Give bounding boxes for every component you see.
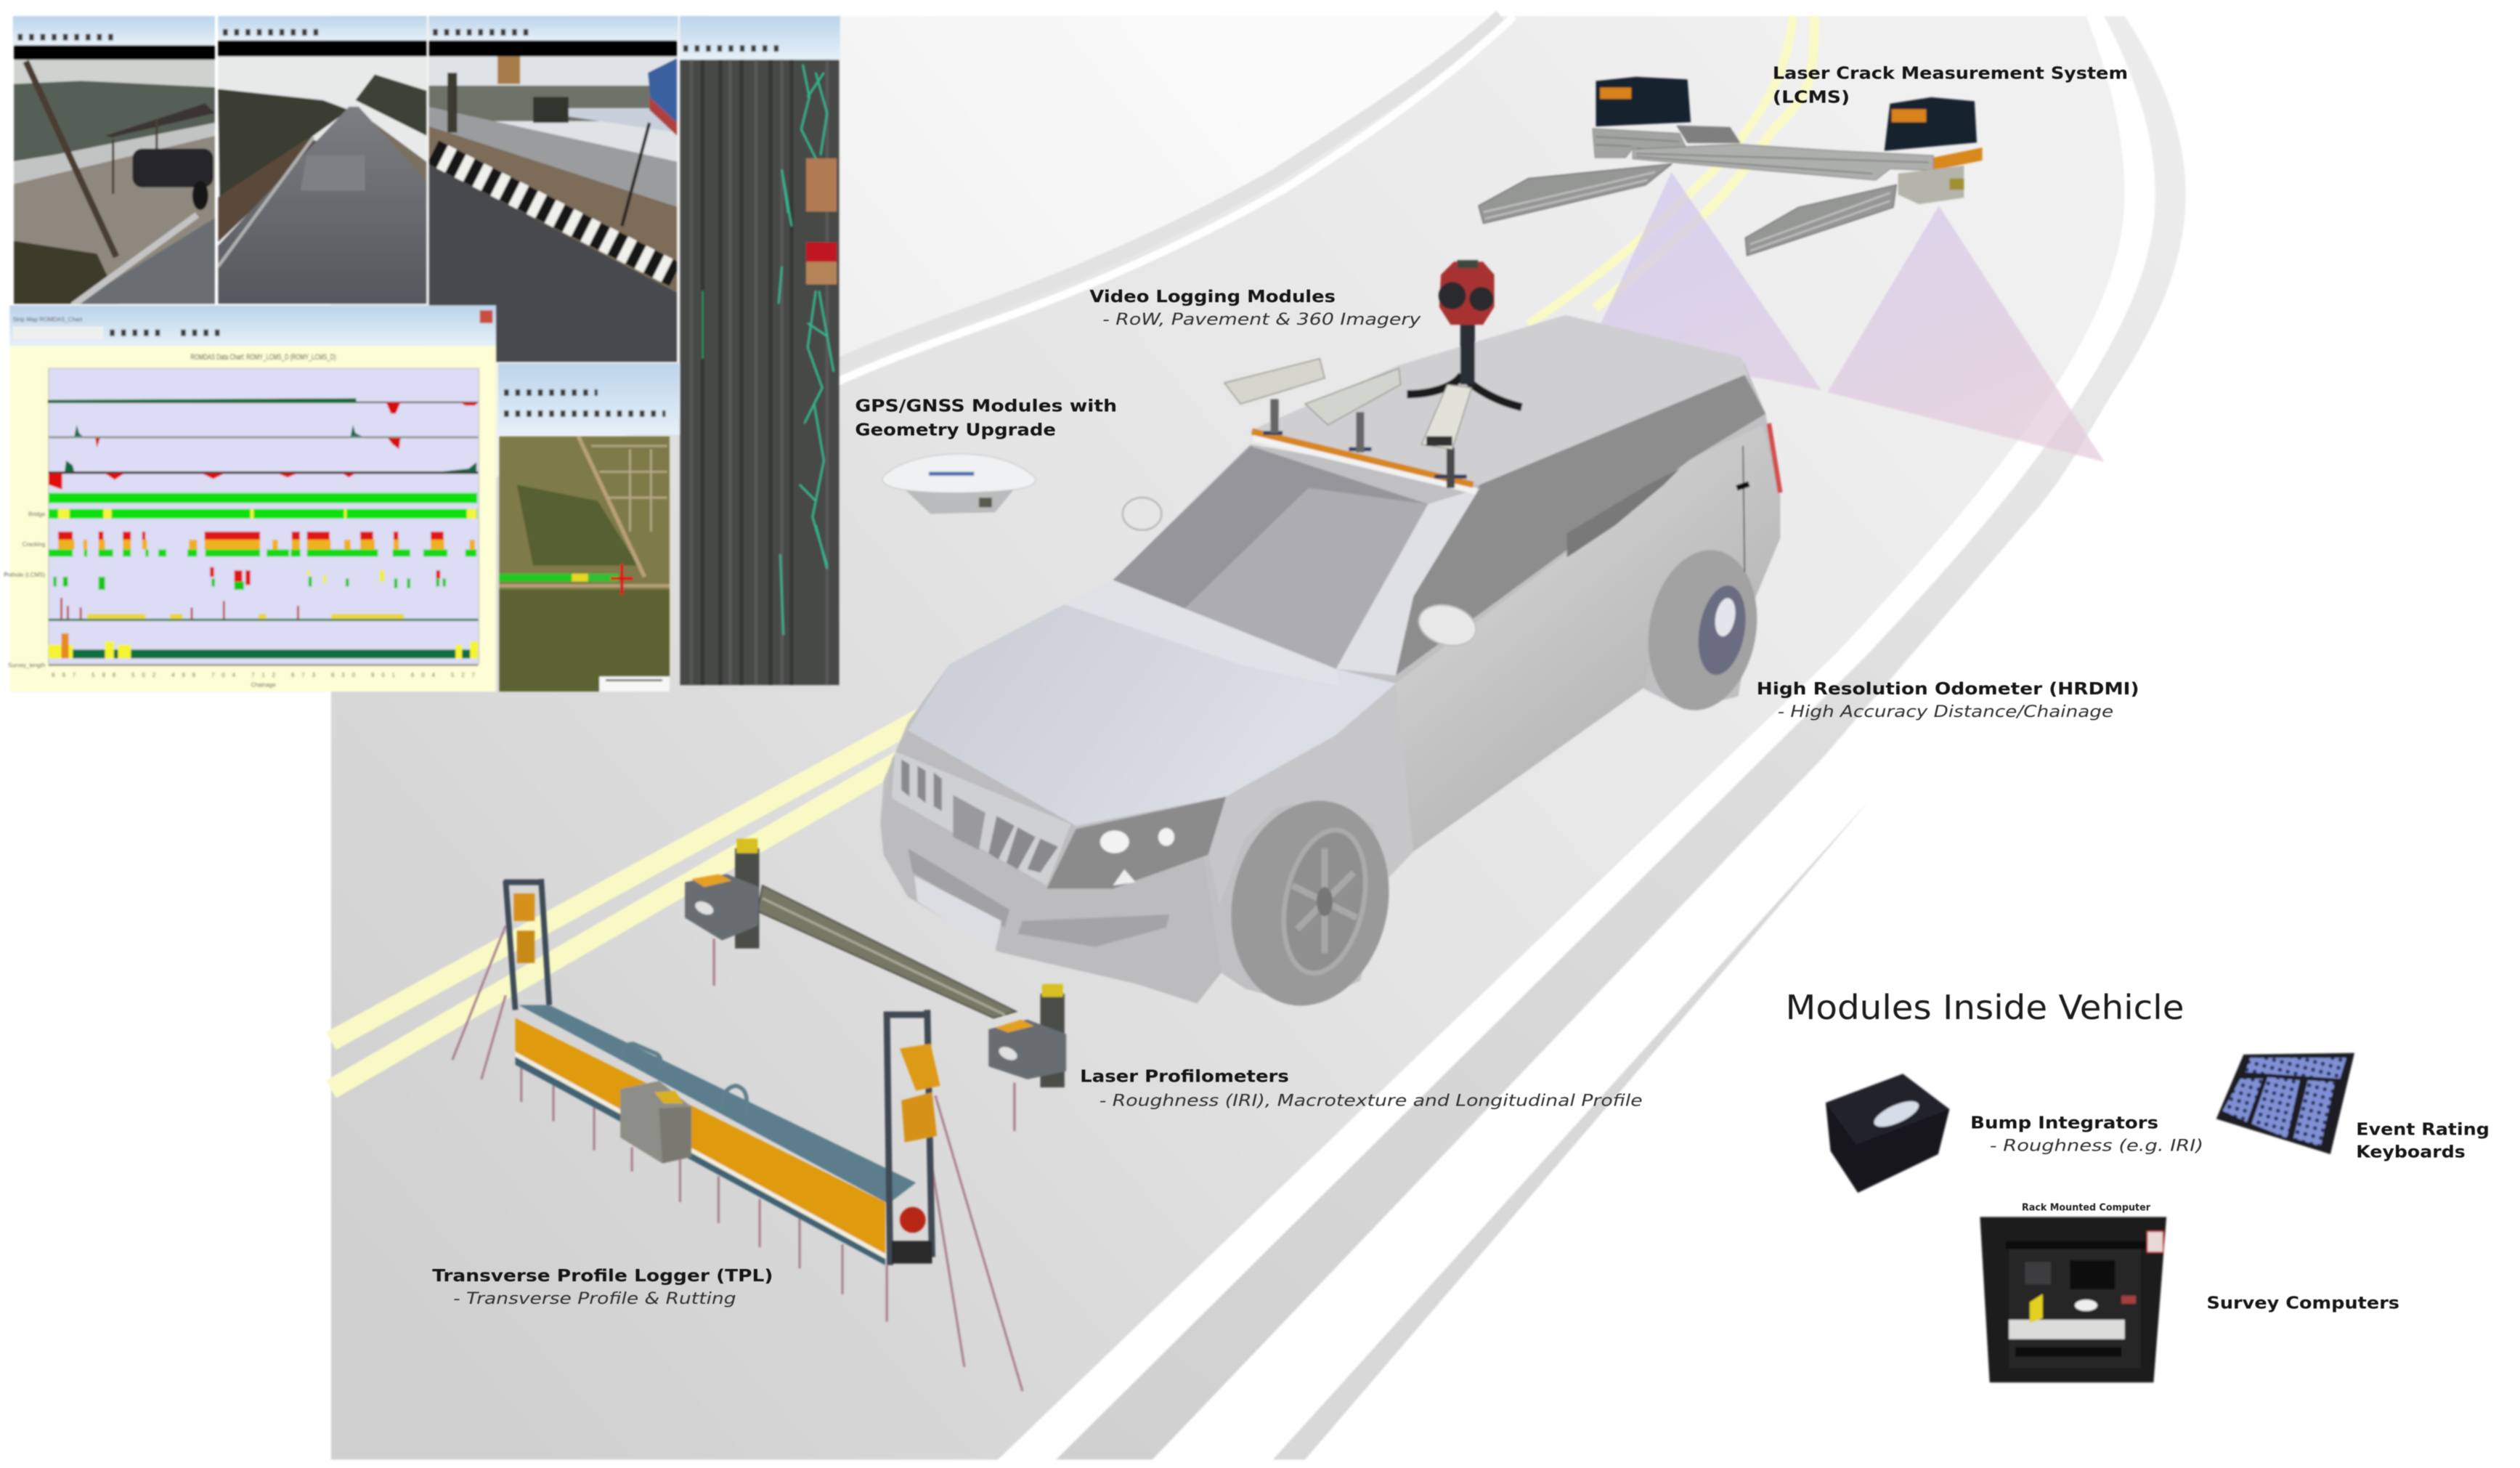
LCMS unit bbox=[1479, 77, 1983, 256]
left road edge white line bbox=[828, 16, 1514, 386]
bridge yellow blocks bbox=[58, 509, 476, 519]
rack yellow tag bbox=[2030, 1294, 2043, 1323]
fender bbox=[1208, 684, 1413, 905]
map area bbox=[499, 437, 670, 693]
TPL left sensor top bbox=[513, 893, 535, 921]
A pillar bbox=[1336, 488, 1480, 676]
chart x axis bbox=[49, 665, 478, 666]
LCMS right sensor box bbox=[1885, 97, 1977, 151]
window 3 toolbar icons bbox=[433, 31, 533, 33]
window 1 road photo bbox=[13, 60, 216, 305]
roof rack white strip bbox=[1253, 438, 1476, 491]
label: survey computers: Survey Computers bbox=[2206, 1292, 2399, 1313]
license plate bbox=[914, 876, 1001, 952]
front rim bbox=[1272, 822, 1378, 981]
GPS dome bbox=[882, 454, 1036, 492]
label: laser profilometers: Laser Profilometers bbox=[1080, 1066, 1289, 1086]
lower bumper intake bbox=[908, 848, 1009, 928]
label: LCMS: Laser Crack Measurement System bbox=[1773, 62, 2128, 83]
profilometer laser lines bbox=[714, 938, 1015, 1131]
360 camera tripod base bbox=[1407, 375, 1521, 407]
series one dips bbox=[386, 402, 478, 413]
software screenshots collage bbox=[4, 16, 840, 693]
chart title bar bbox=[9, 305, 496, 346]
front hub bbox=[1317, 887, 1333, 916]
TPL lower white trim bbox=[516, 1052, 885, 1259]
label: video logging: Video Logging Modules bbox=[1089, 286, 1336, 307]
window 1 toolbar icons bbox=[17, 36, 116, 38]
label: odometer bbox=[1757, 678, 2139, 721]
GPS connector bbox=[979, 498, 992, 507]
windshield inner reflection bbox=[1184, 488, 1428, 669]
LCMS right sensor label bbox=[1892, 109, 1926, 122]
rack drive bay bbox=[2070, 1260, 2115, 1289]
series two spikes bbox=[74, 425, 362, 437]
GPS receiver icon bbox=[882, 454, 1036, 514]
label: odometer: High Resolution Odometer (HRDMI) bbox=[1757, 678, 2139, 699]
LCMS right arm bbox=[1745, 185, 1896, 256]
green trace line bbox=[702, 291, 704, 359]
label: GPS: GPS/GNSS Modules with bbox=[855, 396, 1117, 416]
side windows bbox=[1396, 375, 1765, 676]
potholes yellow marks bbox=[307, 570, 384, 583]
TPL dark base bbox=[892, 1241, 932, 1264]
LCMS main beam bbox=[1633, 145, 1933, 180]
360 camera lens left bbox=[1439, 282, 1466, 309]
rack red connector bbox=[2121, 1296, 2136, 1304]
keyboard right keys bbox=[2293, 1080, 2336, 1146]
spikes bbox=[62, 598, 298, 619]
LCMS left sensor label bbox=[1600, 88, 1631, 99]
off-road pale area bbox=[331, 16, 1501, 530]
TPL laser lines bbox=[452, 926, 1023, 1391]
beam one bbox=[1583, 172, 1821, 391]
front tyre bbox=[1213, 786, 1407, 1021]
rack port row bbox=[2015, 1347, 2121, 1357]
label: event rating: Keyboards bbox=[2356, 1141, 2466, 1161]
video camera two mount bbox=[1358, 412, 1362, 453]
label: GPS bbox=[855, 396, 1117, 440]
pavement scan image bbox=[680, 60, 840, 685]
spikes baseline bbox=[49, 619, 478, 620]
headlight cluster bbox=[1046, 797, 1226, 888]
roof bbox=[1248, 315, 1748, 484]
label: bump integrators: - Roughness (e.g. IRI) bbox=[1990, 1137, 2203, 1156]
mirror far bbox=[1414, 599, 1481, 652]
series three dips bbox=[49, 474, 355, 490]
LCMS left arm rails bbox=[1484, 172, 1655, 219]
chart title: ROMDAS Data Chart: ROMY_LCMS_D (ROMY_LCMS_D) bbox=[190, 353, 336, 362]
rear quarter glass bbox=[1567, 469, 1680, 557]
grille slats left bbox=[901, 759, 942, 811]
map window bbox=[498, 364, 679, 693]
left sensor box bbox=[685, 874, 759, 941]
grille centre mesh bbox=[953, 795, 985, 850]
tail light bbox=[1769, 423, 1780, 492]
window 2 info bar bbox=[218, 41, 426, 57]
window 2 toolbar icons bbox=[223, 31, 320, 33]
beam two bbox=[1827, 206, 2105, 462]
chart window title: Strip Map ROMDAS_Chart bbox=[13, 317, 83, 323]
video window 1 bbox=[13, 16, 216, 305]
car side panel bbox=[1336, 425, 1780, 884]
TPL right sensor top bbox=[900, 1044, 940, 1091]
grille frame bbox=[892, 751, 1071, 885]
right sensor yellow cap bbox=[1042, 984, 1063, 997]
cracking yellow row bbox=[58, 540, 475, 549]
LCMS rail lines bbox=[1596, 137, 1929, 174]
event keyboard base bbox=[2216, 1053, 2354, 1154]
label: LCMS: (LCMS) bbox=[1773, 87, 1850, 108]
crack patch lower bbox=[806, 261, 837, 285]
headlight small lens bbox=[1158, 828, 1174, 845]
window 2 road photo bbox=[218, 57, 426, 304]
yellow line two lower bbox=[331, 723, 964, 1090]
yellow line two upper bbox=[1595, 16, 1814, 308]
right sensor upright bbox=[1040, 994, 1065, 1087]
series three line bbox=[49, 472, 478, 474]
cracking green row bbox=[49, 549, 476, 556]
label: bump integrators: Bump Integrators bbox=[1970, 1113, 2158, 1133]
rear wheel bbox=[1636, 541, 1769, 719]
rear tyre bbox=[1636, 541, 1769, 719]
TPL handle one bbox=[622, 1044, 661, 1070]
potholes row bbox=[210, 567, 440, 585]
right sensor label bbox=[995, 1020, 1034, 1032]
crack patch red bbox=[806, 243, 837, 261]
keyboard left keys bbox=[2223, 1079, 2263, 1122]
chart close button bbox=[480, 310, 492, 323]
LCMS left sensor box bbox=[1596, 77, 1691, 126]
pavement scan wheel paths bbox=[703, 60, 792, 685]
left sensor label bbox=[691, 874, 732, 887]
fog grille bbox=[1017, 915, 1169, 947]
windshield bbox=[1113, 446, 1428, 669]
TPL orange face bbox=[516, 1018, 885, 1254]
cracking red row bbox=[58, 532, 444, 540]
heading: modules inside vehicle: Modules Inside Vehicle bbox=[1786, 988, 2184, 1027]
vehicle bbox=[880, 260, 1780, 1021]
detected crack lines bbox=[779, 65, 834, 635]
GPS brand mark bbox=[929, 472, 974, 476]
fog lens bbox=[1113, 869, 1136, 885]
label: laser profilometers: - Roughness (IRI), Macrotexture and Longitudinal Profile bbox=[1100, 1092, 1643, 1111]
grille slats right bbox=[988, 816, 1058, 872]
surface yellow blocks bbox=[49, 641, 478, 658]
front wheel bbox=[1213, 786, 1407, 1021]
LCMS left arm bbox=[1479, 164, 1672, 224]
TPL right post bbox=[884, 1010, 932, 1265]
crack patch orange bbox=[806, 158, 837, 211]
window 1 info bar bbox=[14, 45, 215, 60]
label: GPS: Geometry Upgrade bbox=[855, 420, 1056, 440]
window 1 toolbar bbox=[13, 16, 215, 45]
video camera one mount bbox=[1273, 399, 1277, 433]
TPL centre box label bbox=[654, 1091, 683, 1103]
yellow line one upper bbox=[1529, 16, 1793, 324]
label: video logging bbox=[1089, 286, 1421, 329]
car body silhouette bbox=[880, 364, 1780, 1005]
video window 3 bbox=[428, 16, 678, 364]
TPL right sensor bottom bbox=[901, 1092, 937, 1143]
bump integrator logo bbox=[1871, 1096, 1922, 1132]
pavement camera mount bbox=[1449, 447, 1452, 488]
map toolbar bbox=[498, 364, 679, 434]
mirror near bbox=[1123, 498, 1161, 530]
label: event rating: Event Rating bbox=[2356, 1119, 2489, 1139]
series three rises bbox=[65, 461, 476, 472]
label: rack computer: Rack Mounted Computer bbox=[2022, 1201, 2150, 1213]
LCMS short rail bbox=[1676, 126, 1741, 143]
right sensor logo bbox=[997, 1045, 1019, 1063]
chart body bbox=[9, 346, 496, 692]
right sensor box bbox=[988, 1020, 1066, 1079]
series two baseline bbox=[49, 437, 478, 438]
yellow speckle bbox=[87, 614, 404, 619]
rear rim bbox=[1692, 582, 1752, 678]
transverse profile logger bbox=[452, 879, 1023, 1391]
crack window toolbar bbox=[680, 16, 840, 60]
potholes green marks bbox=[53, 577, 446, 590]
TPL left sensor bottom bbox=[517, 930, 535, 963]
360 camera top bbox=[1457, 260, 1478, 268]
rack computer inner bbox=[2009, 1249, 2141, 1368]
window 2 toolbar bbox=[218, 16, 426, 41]
video camera one bbox=[1224, 359, 1325, 404]
pavement camera lens bbox=[1426, 437, 1452, 446]
profilometer beam stripe bbox=[763, 899, 1005, 1015]
series two dips bbox=[95, 438, 401, 449]
cowl highlight bbox=[1065, 580, 1341, 686]
antenna tab bbox=[1736, 482, 1750, 490]
front fascia bbox=[880, 730, 1222, 1003]
window 3 info bar bbox=[429, 41, 677, 57]
labels bbox=[432, 62, 2489, 1313]
surface orange block bbox=[62, 633, 69, 658]
laser profilometer unit bbox=[685, 838, 1066, 1131]
TPL centre box side bbox=[659, 1107, 691, 1164]
keyboard top keys bbox=[2245, 1058, 2346, 1079]
rack white panel bbox=[2009, 1320, 2125, 1339]
LCMS orange end plate bbox=[1933, 147, 1983, 171]
map toolbar icons bbox=[504, 393, 665, 413]
label: event rating bbox=[2356, 1119, 2489, 1161]
plot area bbox=[49, 368, 479, 664]
antenna bbox=[1743, 446, 1744, 572]
label: TPL: Transverse Profile Logger (TPL) bbox=[432, 1265, 773, 1286]
pavement camera bbox=[1421, 384, 1471, 449]
rack warning sign bbox=[2147, 1231, 2163, 1252]
TPL handle two bbox=[722, 1086, 747, 1115]
thin grey sliver right bbox=[1273, 799, 1871, 1459]
bump integrator top face bbox=[1826, 1074, 1949, 1145]
left sensor upright bbox=[735, 848, 759, 949]
surface base band bbox=[49, 649, 478, 658]
window 3 toolbar bbox=[429, 16, 678, 41]
hood bbox=[908, 580, 1396, 826]
LCMS control box tag bbox=[1949, 179, 1964, 190]
rack computer rail bbox=[2006, 1241, 2147, 1249]
label: TPL: - Transverse Profile & Rutting bbox=[453, 1289, 736, 1308]
series one line bbox=[355, 402, 478, 403]
LCMS left block bbox=[1593, 129, 1688, 158]
keyboard middle keys bbox=[2251, 1077, 2300, 1138]
left road edge band bbox=[828, 16, 1501, 370]
series one bbox=[49, 399, 355, 402]
LCMS control box bbox=[1898, 166, 1964, 204]
label: odometer: - High Accuracy Distance/Chainage bbox=[1778, 702, 2113, 721]
double yellow centre lines bbox=[331, 16, 1814, 1090]
road surface bbox=[331, 16, 2125, 1459]
360 camera pole bbox=[1460, 320, 1475, 384]
label: TPL bbox=[432, 1265, 773, 1308]
main right white line bbox=[998, 16, 2155, 1459]
LCMS laser beams bbox=[1583, 172, 2105, 462]
label: bump integrators bbox=[1970, 1113, 2203, 1156]
chart row label bridge: Bridge bbox=[28, 511, 46, 518]
TPL left post bbox=[504, 879, 549, 1010]
video camera two bbox=[1305, 368, 1401, 425]
label: LCMS bbox=[1773, 62, 2128, 108]
green survey band bbox=[49, 492, 477, 503]
rack vents bbox=[2025, 1262, 2051, 1284]
video window 2 bbox=[218, 16, 426, 304]
profilometer beam bbox=[757, 885, 1016, 1018]
chart row label cracking: Cracking bbox=[23, 541, 45, 548]
mounting blocks bbox=[1263, 433, 1467, 477]
road background bbox=[331, 16, 2186, 1459]
bridge band bbox=[49, 509, 477, 519]
roof rack orange bar bbox=[1252, 431, 1474, 484]
rack logo bbox=[2075, 1299, 2097, 1311]
GPS lower body bbox=[900, 484, 1017, 514]
TPL centre box bbox=[620, 1081, 691, 1164]
front spokes bbox=[1292, 848, 1357, 953]
chart row label potholes: Pothole (LCMS) bbox=[4, 572, 46, 578]
headlight lens bbox=[1100, 830, 1129, 853]
360 camera lens right bbox=[1469, 287, 1493, 311]
chart row label survey length: Survey_length bbox=[8, 662, 45, 669]
chart toolbar combo bbox=[13, 326, 103, 339]
crack window toolbar icons bbox=[683, 47, 784, 50]
TPL red marker bbox=[900, 1207, 926, 1233]
grey band between right white lines bbox=[1056, 16, 2186, 1459]
left sensor yellow cap bbox=[736, 838, 757, 853]
TPL lower teal trim bbox=[516, 1057, 885, 1265]
chart window bbox=[4, 305, 496, 692]
LCMS right arm rails bbox=[1750, 193, 1890, 251]
chart axis tick labels: 697 598 502 498 704 712 673 630 901 604 527 bbox=[52, 672, 476, 678]
crack image window bbox=[680, 16, 840, 685]
yellow line one lower bbox=[331, 694, 964, 1041]
chart toolbar icons bbox=[110, 331, 220, 334]
chart axis title: Chainage bbox=[251, 681, 276, 688]
rear hub highlight bbox=[1712, 596, 1738, 638]
label: video logging: - RoW, Pavement & 360 Imagery bbox=[1102, 310, 1421, 329]
360 camera head bbox=[1439, 261, 1495, 325]
label: laser profilometers bbox=[1080, 1066, 1643, 1111]
left sensor logo bbox=[693, 899, 715, 917]
rack computer frame bbox=[1980, 1217, 2166, 1382]
modules inside vehicle bbox=[1826, 1053, 2354, 1382]
window 3 road photo bbox=[428, 57, 678, 364]
bump integrator box bbox=[1826, 1074, 1949, 1193]
TPL beam top bbox=[519, 1005, 916, 1204]
